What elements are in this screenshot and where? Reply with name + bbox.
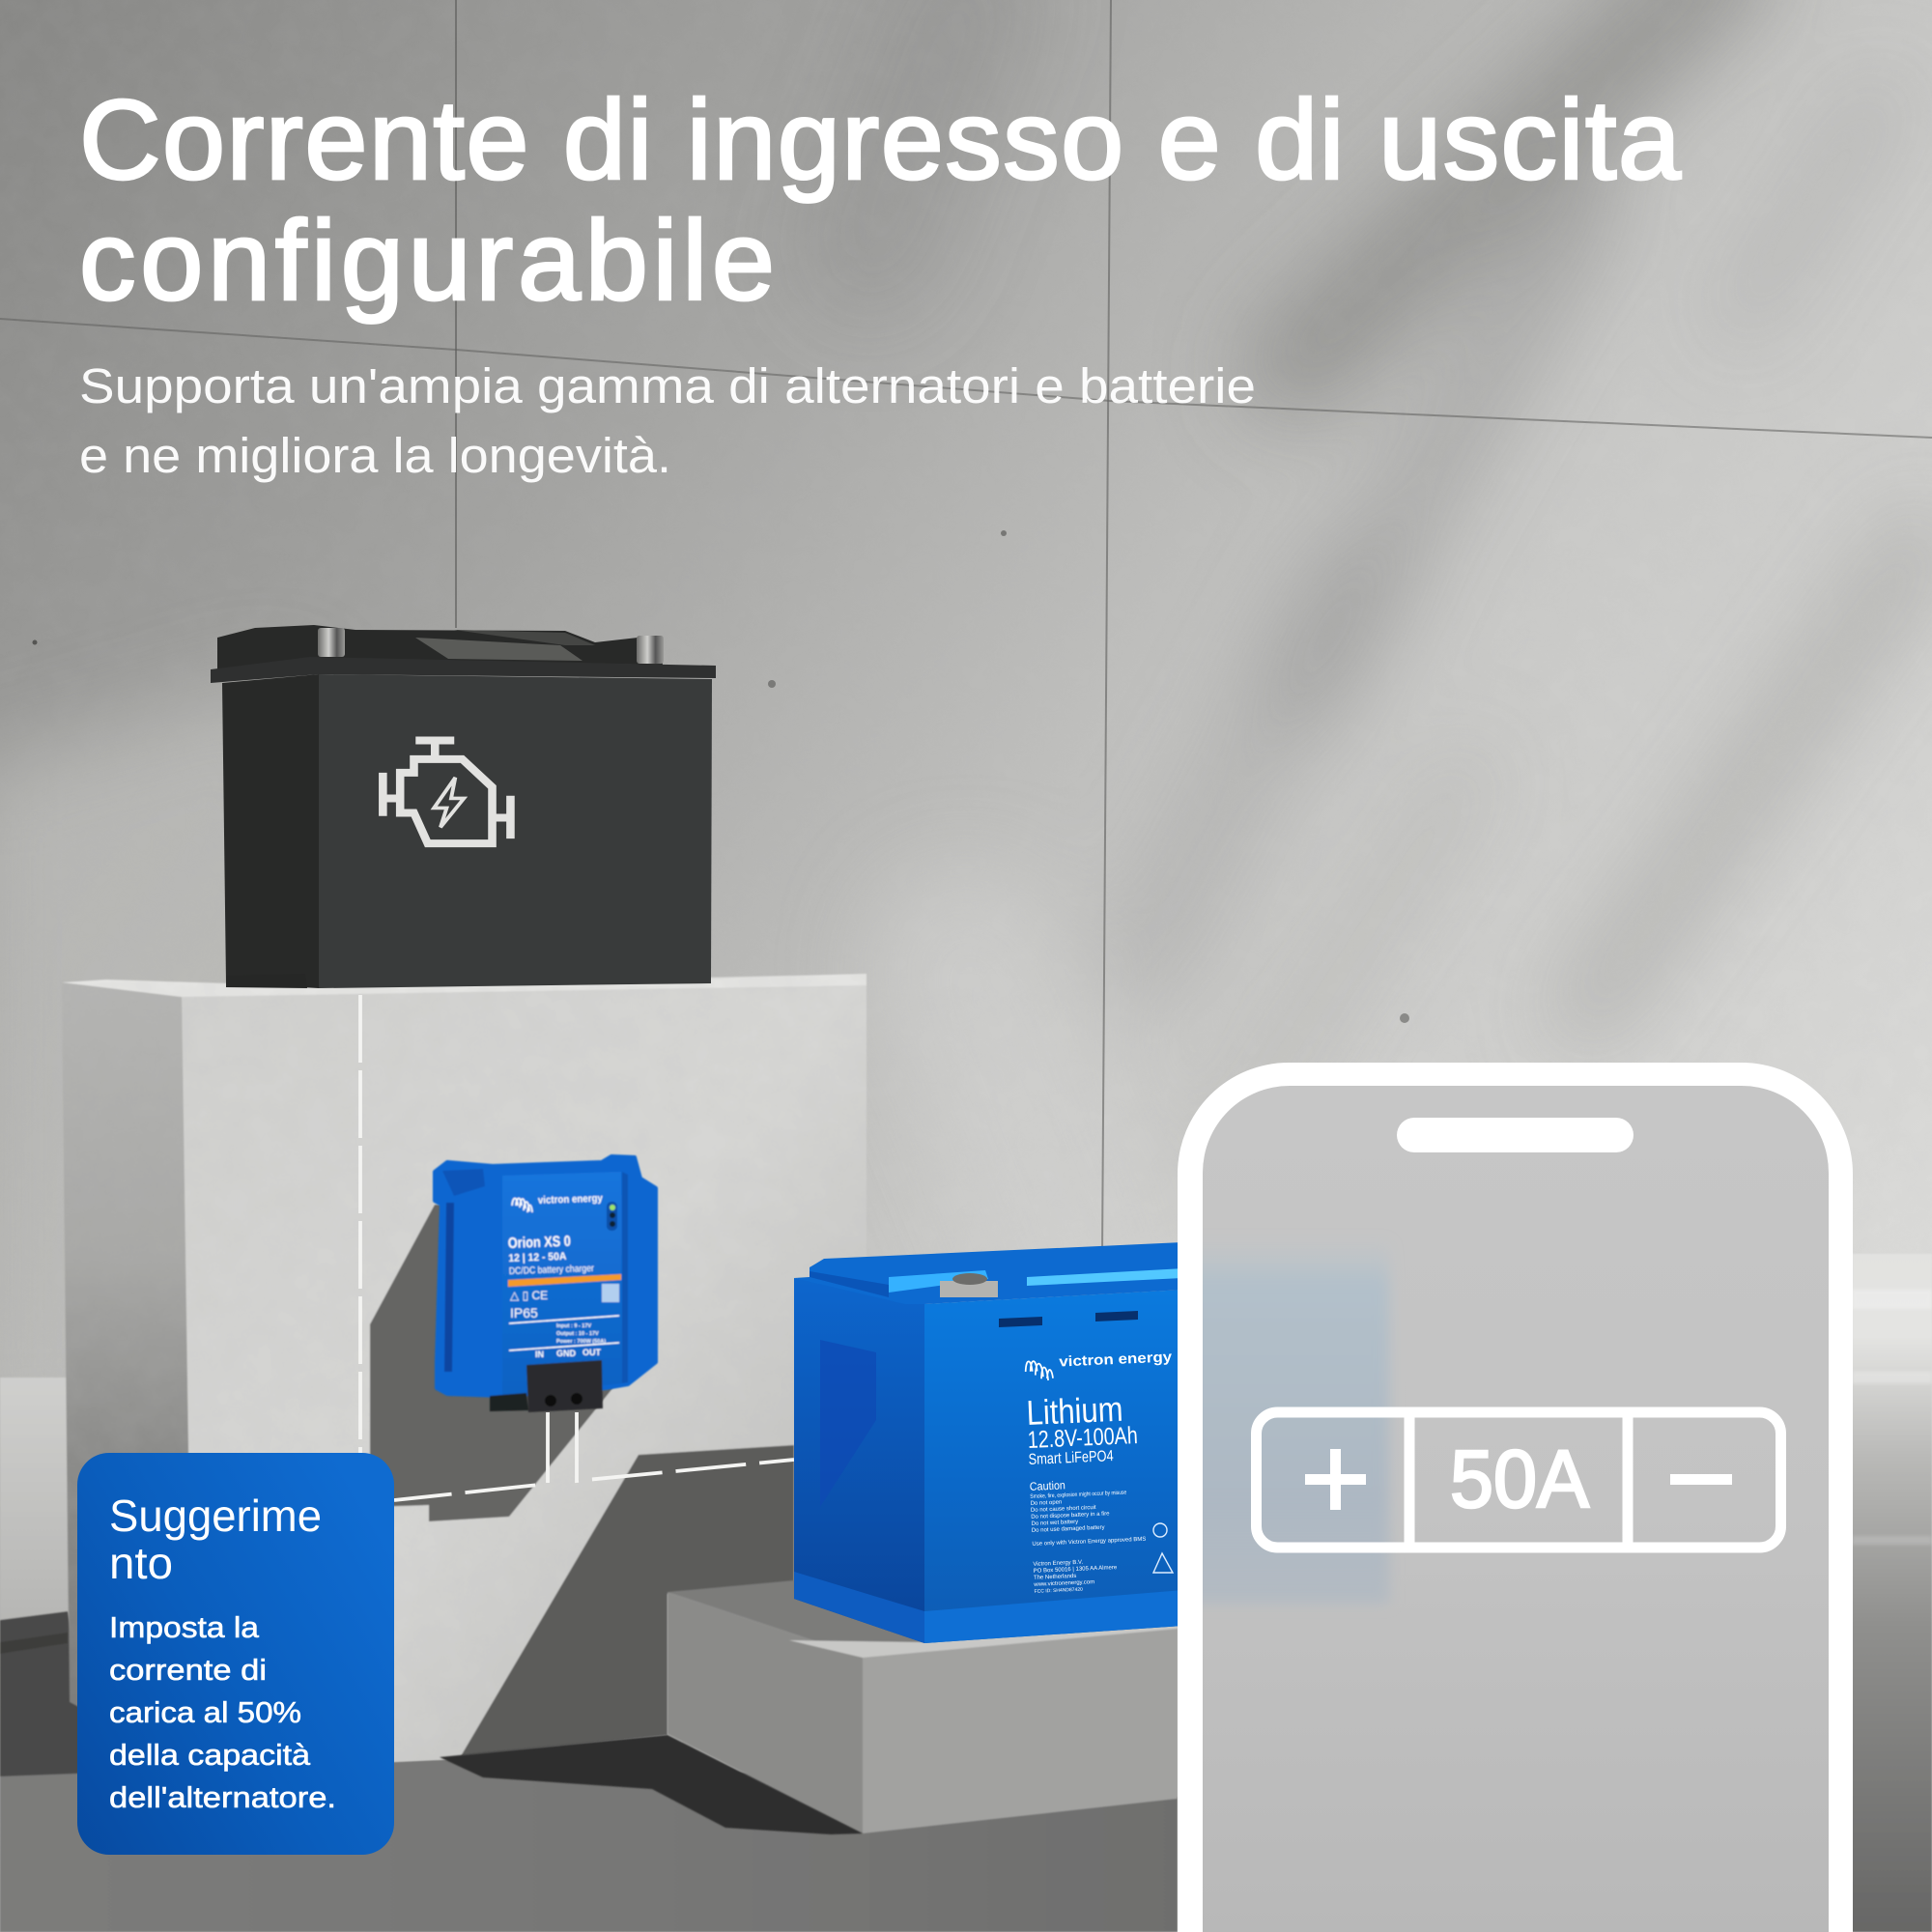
Orion XS charger device: victron energy xyxy=(538,1193,604,1207)
subtitle: e ne migliora la longevità. xyxy=(79,428,671,483)
lithium battery label: Do not wet battery xyxy=(1031,1520,1078,1527)
title xyxy=(79,76,1682,324)
lithium battery front face xyxy=(924,1290,1183,1643)
charger QR code xyxy=(602,1284,619,1302)
lithium battery label xyxy=(1024,1353,1172,1593)
car battery xyxy=(211,625,716,988)
tip body: corrente di xyxy=(109,1653,267,1687)
charger orange stripe xyxy=(508,1274,621,1287)
dashed wiring lines xyxy=(360,995,794,1500)
charger rating text: OUT xyxy=(582,1348,601,1357)
charger rating text: IN xyxy=(535,1350,544,1359)
Orion XS charger device xyxy=(435,1156,656,1412)
lithium battery label: 12.8V-100Ah xyxy=(1027,1422,1138,1454)
battery front xyxy=(319,674,712,988)
subtitle: Supporta un'ampia gamma di alternatori e batterie xyxy=(79,358,1256,413)
lithium battery side face xyxy=(794,1278,924,1643)
battery terminals xyxy=(318,628,345,657)
battery rim xyxy=(211,657,716,683)
lithium battery xyxy=(794,1242,1183,1643)
plus button xyxy=(1305,1449,1366,1510)
lithium battery certification marks xyxy=(1153,1523,1173,1573)
title: configurabile xyxy=(79,197,775,324)
charger logo xyxy=(512,1198,532,1212)
lithium battery label: Do not cause short circuit xyxy=(1031,1505,1096,1514)
lithium battery label: Smoke, fire, explosion might occur by misuse xyxy=(1030,1491,1127,1500)
current stepper control xyxy=(1256,1410,1781,1549)
charger model text xyxy=(508,1233,595,1277)
charger rating text: GND xyxy=(556,1349,576,1358)
lithium battery label: Lithium xyxy=(1026,1389,1123,1433)
blurred battery behind screen xyxy=(1159,1241,1389,1604)
charger connector cover xyxy=(526,1360,603,1412)
lithium battery label: victron energy xyxy=(1059,1349,1173,1370)
floor shadow of plinths xyxy=(440,1735,863,1834)
tip heading xyxy=(109,1491,322,1588)
lithium battery label: Use only with Victron Energy approved BMS xyxy=(1032,1537,1146,1548)
lithium battery label: Caution xyxy=(1030,1478,1065,1493)
tip body: carica al 50% xyxy=(109,1695,301,1729)
charger model text: Orion XS 0 xyxy=(508,1234,571,1252)
lithium battery label: Do not use damaged battery xyxy=(1032,1525,1105,1534)
charger front face xyxy=(502,1172,622,1396)
stepper frame xyxy=(1256,1412,1781,1548)
concrete cube plinth xyxy=(58,966,869,1777)
tip card xyxy=(77,1453,394,1855)
lower plinth xyxy=(668,1580,1178,1833)
charger model text: DC/DC battery charger xyxy=(509,1264,595,1277)
phone frame xyxy=(1178,1063,1853,1932)
subtitle xyxy=(79,358,1256,483)
tip heading: nto xyxy=(109,1538,173,1588)
title: Corrente di ingresso e di uscita xyxy=(79,76,1682,203)
tip heading: Suggerime xyxy=(109,1491,322,1541)
charger rating text: Output : 10 - 17V xyxy=(556,1331,599,1337)
charger rating text xyxy=(509,1289,619,1359)
charger rating text: IP65 xyxy=(510,1305,538,1321)
phone xyxy=(1159,1063,1853,1932)
tip body: della capacità xyxy=(109,1738,311,1772)
current value: 50A xyxy=(1450,1434,1589,1524)
battery side xyxy=(222,674,319,988)
shadow on cube from lithium battery xyxy=(461,1445,794,1756)
phone speaker notch xyxy=(1397,1118,1634,1152)
floor xyxy=(0,1254,1932,1932)
charger model text: 12 | 12 - 50A xyxy=(508,1251,567,1264)
charger rating text: Input : 9 - 17V xyxy=(556,1323,591,1329)
lithium battery label: Do not open xyxy=(1031,1499,1062,1507)
lithium battery label: Do not dispose battery in a fire xyxy=(1031,1511,1110,1520)
shadow on cube from device xyxy=(370,1205,618,1521)
charger rating text: △ ▯ CE xyxy=(510,1289,548,1302)
minus button xyxy=(1670,1474,1732,1485)
charger LEDs xyxy=(607,1202,617,1231)
lithium battery label: www.victronenergy.com xyxy=(1033,1579,1094,1588)
charger body xyxy=(435,1156,656,1396)
tip body: dell'alternatore. xyxy=(109,1780,336,1814)
lithium battery label: FCC ID: SH4ND87420 xyxy=(1035,1587,1083,1595)
lithium battery slots xyxy=(999,1317,1042,1327)
charger rating text: Power : 700W (50A) xyxy=(556,1339,606,1345)
lithium battery lid xyxy=(794,1242,1183,1304)
charger right rail xyxy=(622,1172,628,1383)
charger side flange xyxy=(444,1203,454,1372)
phone screen xyxy=(1203,1086,1829,1932)
tip body: Imposta la xyxy=(109,1610,260,1644)
lithium battery terminal xyxy=(940,1273,998,1297)
icon: engine with lightning bolt xyxy=(383,741,510,843)
lithium battery label: Smart LiFePO4 xyxy=(1028,1448,1114,1468)
lithium battery label: PO Box 50016 | 1305 AA Almere xyxy=(1034,1565,1118,1575)
battery lid parts xyxy=(217,625,663,671)
lithium battery label: Victron Energy B.V. xyxy=(1033,1560,1084,1568)
lithium battery label: The Netherlands xyxy=(1034,1574,1076,1581)
tip body xyxy=(109,1610,336,1814)
